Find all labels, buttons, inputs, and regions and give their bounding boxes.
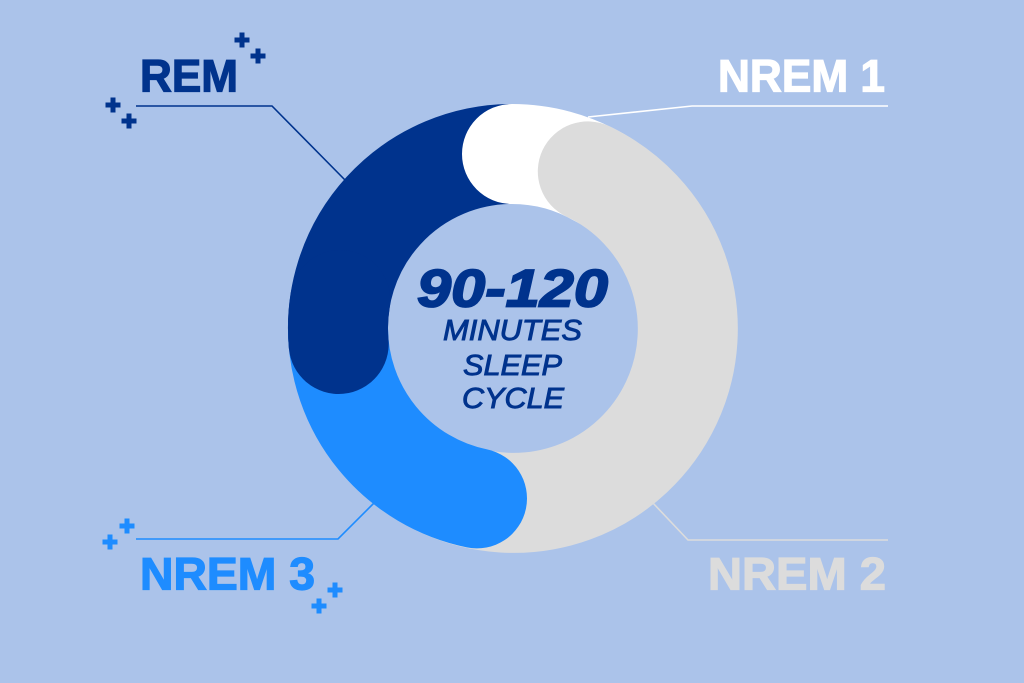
center label: cycle: CYCLE	[462, 383, 565, 415]
connector: REM	[136, 106, 346, 181]
label: NREM 3: NREM 3	[140, 549, 315, 600]
donut segment: REM	[338, 154, 512, 344]
connector: NREM 2	[652, 502, 888, 540]
center number: 90-120	[417, 260, 608, 318]
center text	[417, 260, 608, 415]
center label: minutes: MINUTES	[443, 315, 583, 347]
label: NREM 2: NREM 2	[708, 549, 886, 600]
donut segment: NREM 2	[440, 171, 688, 503]
icon: sparkles near NREM 3	[102, 518, 342, 614]
connector: NREM 3	[136, 503, 374, 539]
donut segment: NREM 1	[512, 154, 600, 178]
icon: sparkles near REM	[106, 32, 266, 128]
center label: sleep: SLEEP	[463, 350, 563, 382]
label: REM: REM	[140, 51, 238, 102]
donut segment: NREM 3	[338, 328, 477, 498]
label: NREM 1: NREM 1	[718, 51, 885, 102]
connector: NREM 1	[588, 106, 888, 117]
donut segment: REM rounded end	[338, 300, 340, 344]
